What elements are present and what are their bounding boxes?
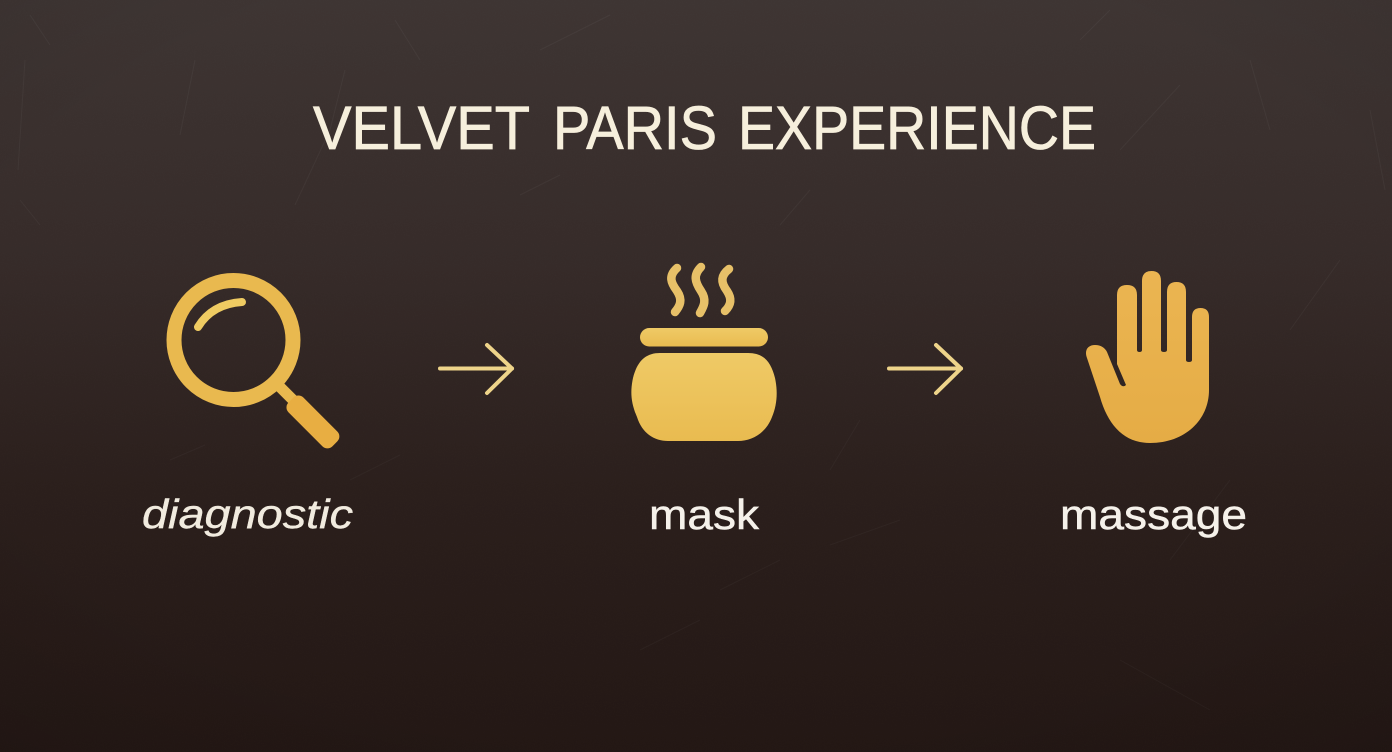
arrow: mask to massage — [889, 345, 961, 393]
icon: steaming jar — [631, 267, 777, 441]
label: diagnostic: diagnostic — [142, 491, 354, 537]
title: VELVET — [313, 94, 530, 162]
icon: open hand — [1086, 271, 1209, 443]
step 2: mask — [631, 267, 777, 538]
label: massage: massage — [1060, 491, 1247, 538]
arrow: diagnostic to mask — [440, 345, 512, 393]
step 3: massage — [1060, 271, 1247, 538]
label: mask: mask — [649, 491, 760, 538]
icon: magnifying glass — [174, 280, 342, 451]
title — [313, 94, 1096, 162]
title: EXPERIENCE — [738, 94, 1096, 162]
title: PARIS — [553, 94, 717, 162]
step 1: diagnostic — [142, 280, 354, 537]
